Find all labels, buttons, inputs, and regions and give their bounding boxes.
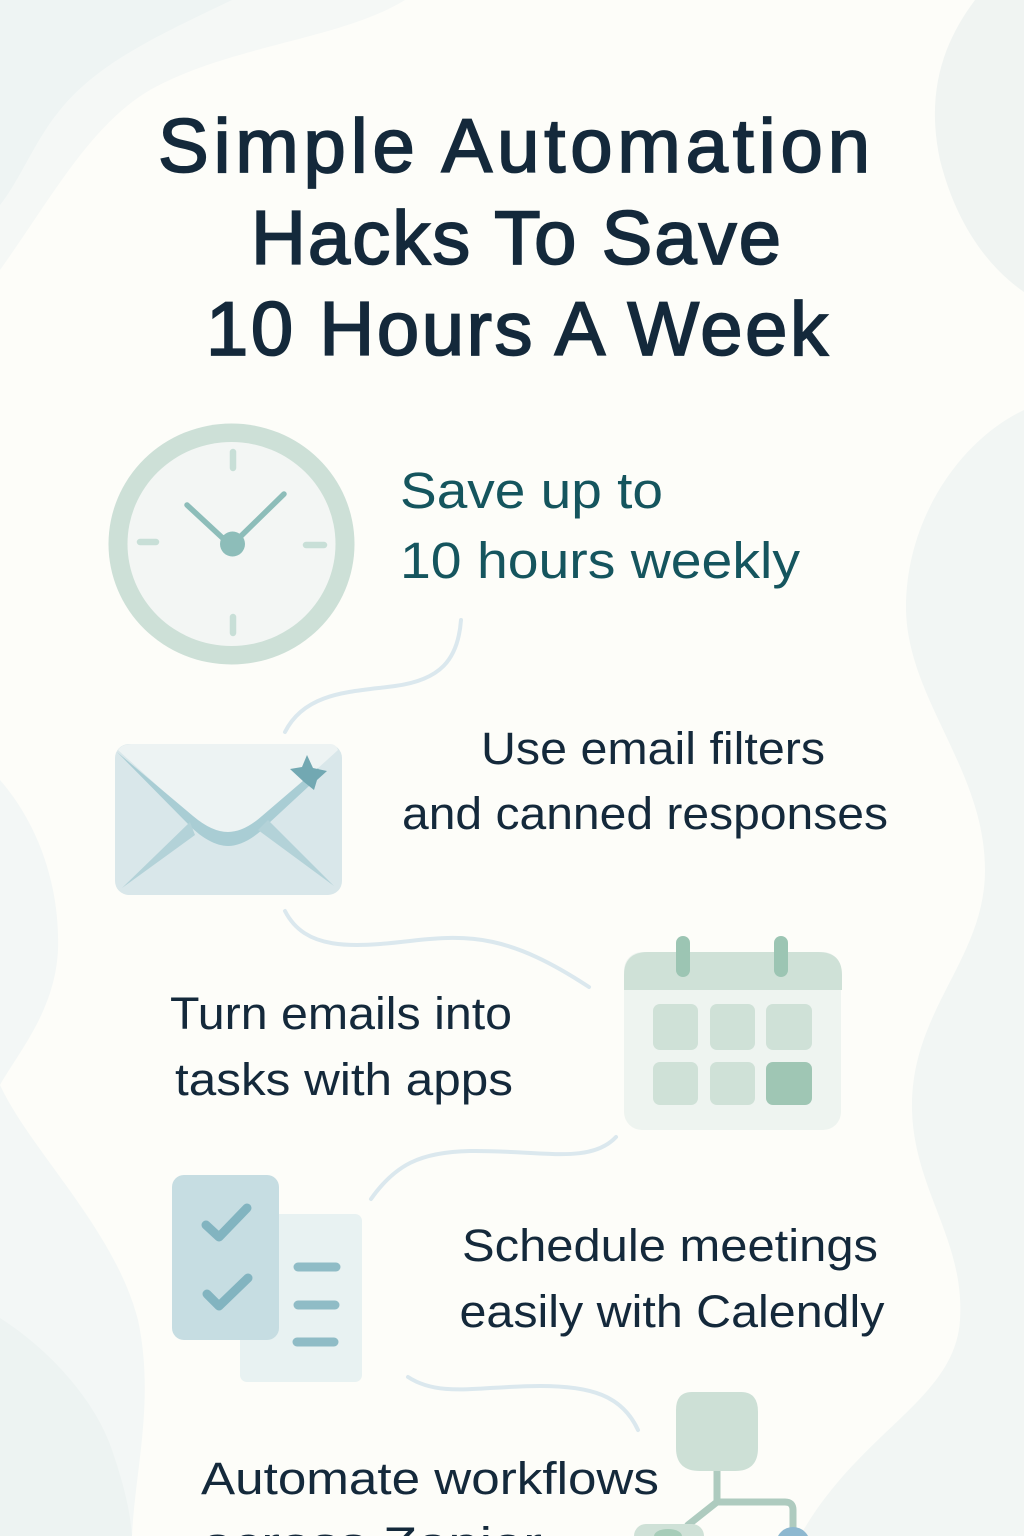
title: Simple Automation [158, 104, 870, 189]
title: 10 Hours A Week [206, 287, 829, 372]
text: turn emails into tasks: tasks with apps [175, 1054, 513, 1105]
title: Hacks To Save [251, 196, 781, 281]
icon: workflow [634, 1392, 810, 1536]
text: email filters: Use email filters [481, 723, 825, 774]
icon: calendar [624, 936, 842, 1130]
callout: save up to 10 hours weekly: Save up to [400, 462, 663, 519]
icon: clock [108, 424, 354, 664]
callout: save up to 10 hours weekly [400, 462, 801, 589]
callout: save up to 10 hours weekly: 10 hours weekly [400, 532, 801, 589]
text: email filters [402, 723, 888, 839]
arrow: clock to email [285, 620, 461, 732]
arrow: calendar to checklist [371, 1137, 616, 1199]
text: email filters: and canned responses [402, 788, 888, 839]
title [158, 104, 870, 372]
text: turn emails into tasks: Turn emails into [170, 988, 512, 1039]
text: schedule meetings: easily with Calendly [460, 1286, 885, 1337]
text: schedule meetings: Schedule meetings [462, 1220, 878, 1271]
text: automate workflows: Automate workflows [201, 1453, 659, 1504]
arrow: email to calendar [285, 911, 589, 987]
icon: email [115, 744, 342, 895]
icon: checklist [172, 1175, 362, 1382]
text: automate workflows [201, 1453, 659, 1536]
arrow: checklist to workflow [408, 1377, 638, 1430]
text: schedule meetings [460, 1220, 885, 1337]
text: turn emails into tasks [170, 988, 513, 1105]
